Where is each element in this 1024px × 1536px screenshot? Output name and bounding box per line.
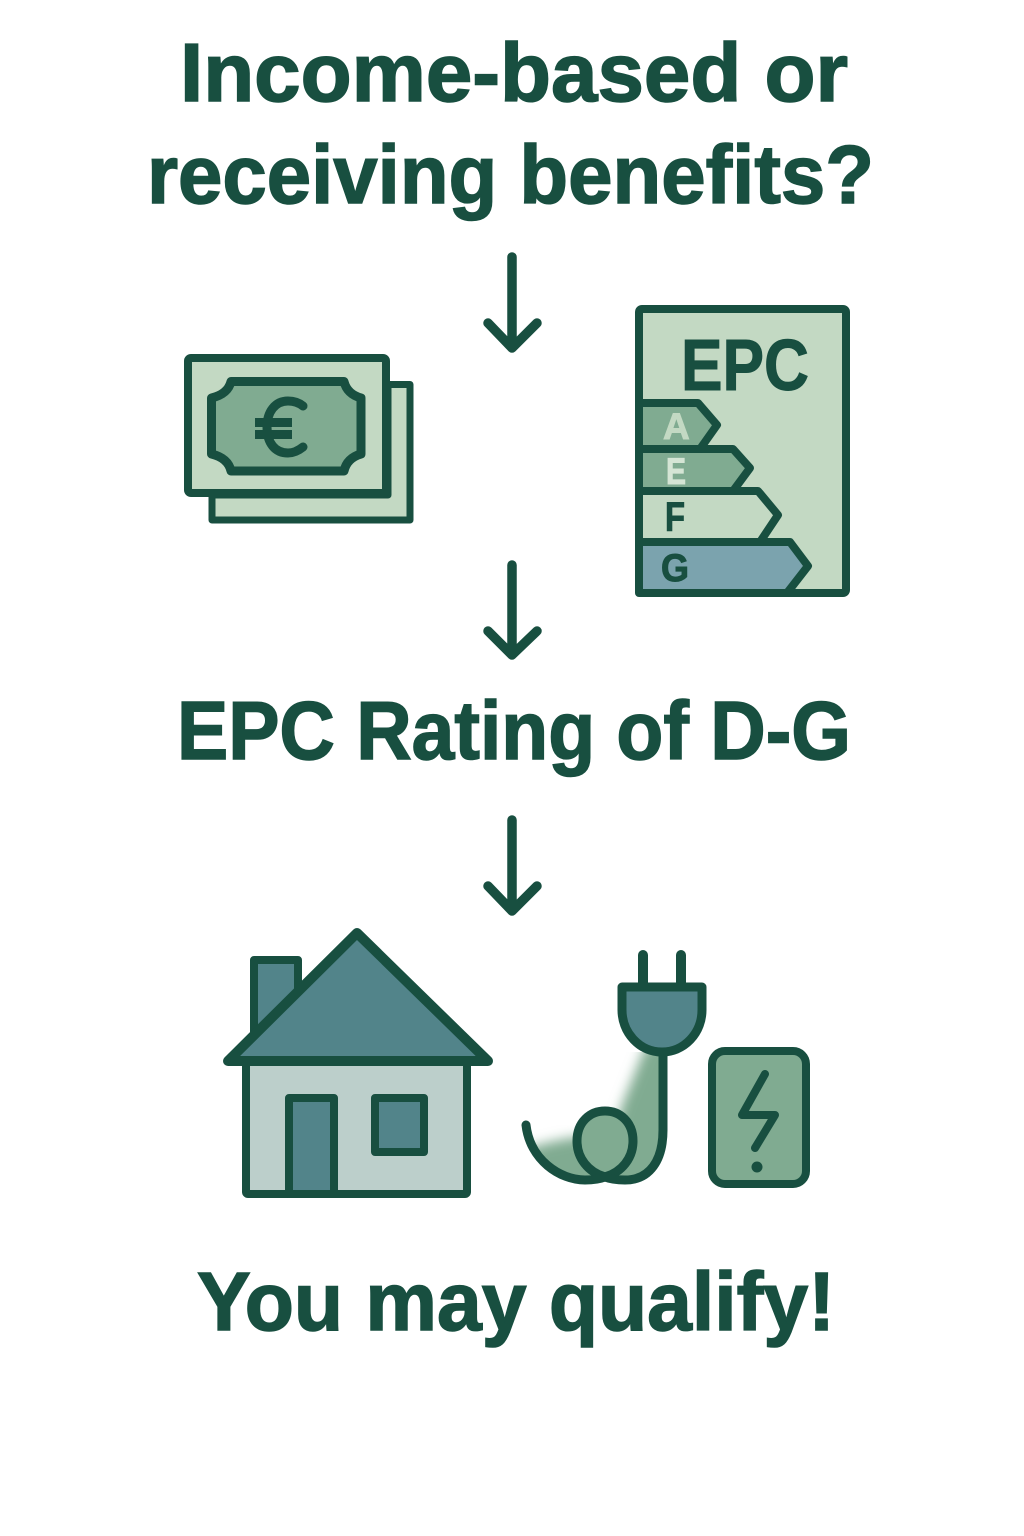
- icon: electric device: [712, 1051, 806, 1184]
- band letters: G: [661, 547, 689, 590]
- band letters: F: [665, 494, 685, 540]
- arrow: rating to house: [488, 820, 537, 911]
- closing message: You may qualify!: [197, 1255, 835, 1348]
- icon: house: [228, 933, 488, 1194]
- band F: [639, 491, 778, 542]
- icon: plug and cable: [518, 955, 702, 1195]
- icon: euro banknotes: [188, 358, 410, 520]
- title: [147, 26, 874, 221]
- icon: EPC certificate: [639, 309, 846, 593]
- title: receiving benefits?: [147, 128, 874, 221]
- band letters: [661, 406, 690, 590]
- EPC label: EPC: [681, 326, 809, 406]
- band A: [639, 403, 717, 449]
- band letters: E: [666, 451, 686, 492]
- arrow: icons to EPC rating: [488, 565, 537, 655]
- title: Income-based or: [180, 26, 848, 119]
- band E: [639, 449, 750, 491]
- band G: [639, 542, 808, 593]
- band letters: A: [663, 406, 690, 447]
- heading: EPC rating: EPC Rating of D-G: [177, 684, 851, 777]
- arrow: income to icons: [488, 257, 537, 348]
